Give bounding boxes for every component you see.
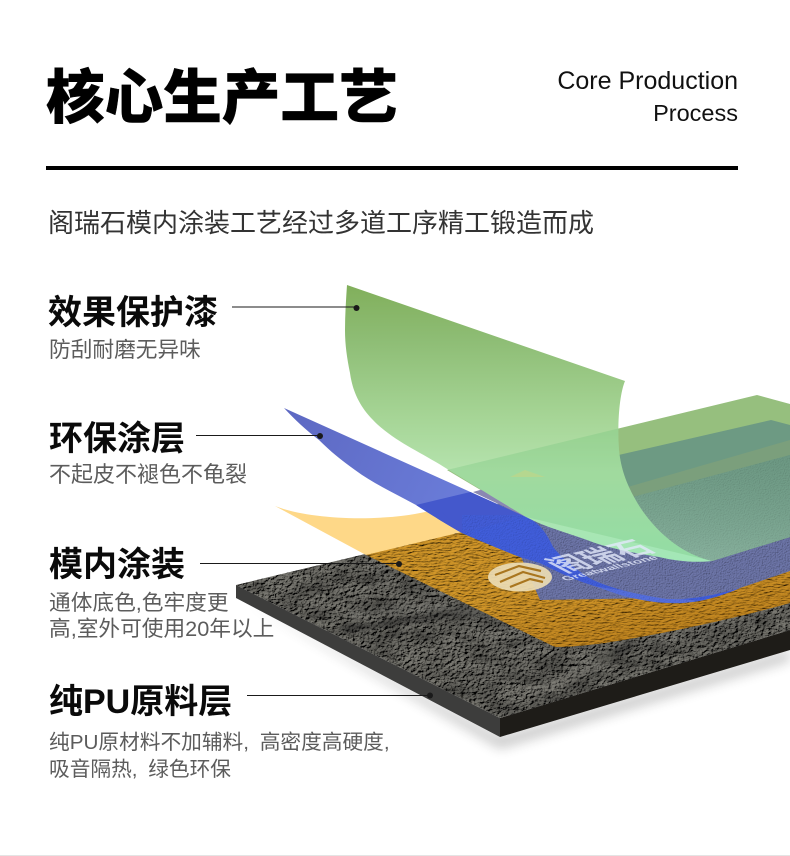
label: mould coating — [49, 546, 274, 641]
slab shadow — [245, 600, 790, 748]
slab: pure PU stone board — [236, 552, 790, 737]
logo wordmark on board: 阁瑞石 — [538, 537, 663, 576]
heading: 效果保护漆 — [48, 294, 218, 332]
heading: 模内涂装 — [49, 546, 185, 584]
english subtitle: Core Production — [557, 67, 738, 95]
heading: 纯PU原料层 — [49, 683, 232, 721]
label: PU layer — [49, 683, 390, 781]
description: 纯PU原材料不加辅料, 高密度高硬度, — [49, 731, 390, 754]
flat coating: grey-blue textured layer — [498, 504, 790, 600]
leader line: PU layer — [247, 692, 433, 698]
description: 高,室外可使用20年以上 — [49, 616, 274, 641]
blue environmental coating sheet — [284, 408, 760, 610]
yellow coating film — [275, 502, 480, 555]
description — [49, 590, 274, 641]
leader line: mould coating — [200, 561, 402, 567]
label: eco coating — [49, 420, 247, 487]
description — [49, 731, 390, 781]
layered material illustration — [196, 285, 790, 753]
description: 通体底色,色牢度更 — [49, 590, 229, 615]
title: 核心生产工艺 — [46, 66, 398, 131]
heading: 环保涂层 — [49, 420, 185, 458]
logo latin text on board: Greatwallstone — [558, 554, 662, 582]
logo mark on board — [488, 562, 552, 592]
english subtitle: Process — [653, 100, 738, 126]
leader line: protective lacquer — [232, 305, 360, 311]
description: 吸音隔热, 绿色环保 — [49, 758, 231, 781]
flat green film on the board — [440, 390, 790, 570]
description: 防刮耐磨无异味 — [49, 337, 201, 362]
mould coating: orange textured layer — [366, 532, 790, 647]
green protective lacquer sheet — [345, 285, 712, 562]
heading rule — [46, 166, 738, 170]
leader line: eco coating — [196, 433, 323, 439]
label: protective lacquer — [48, 294, 218, 362]
intro sentence: 阁瑞石模内涂装工艺经过多道工序精工锻造而成 — [48, 208, 594, 238]
english subtitle — [557, 67, 738, 126]
description: 不起皮不褪色不龟裂 — [49, 462, 247, 487]
